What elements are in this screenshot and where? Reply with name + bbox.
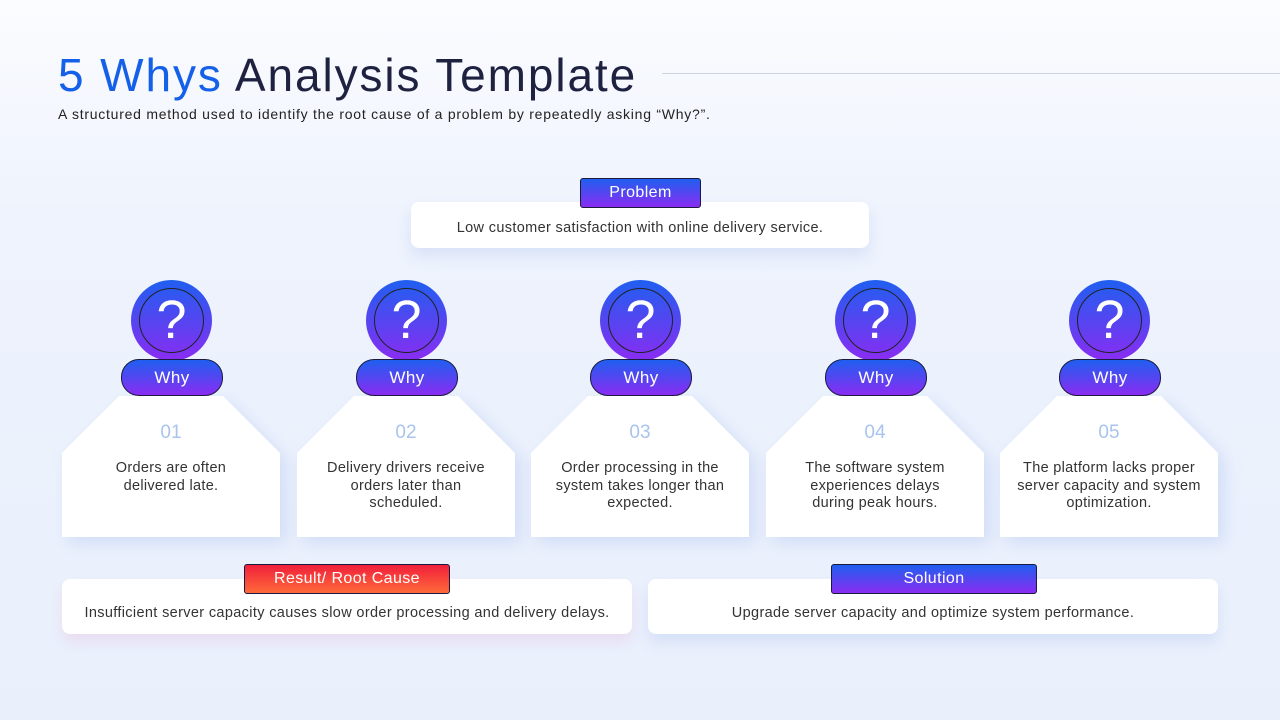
icon: question 5 [1069, 280, 1150, 361]
subtitle: A structured method used to identify the root cause of a problem by repeatedly asking “Why?”. [58, 106, 711, 122]
icon: question 1 [131, 280, 212, 361]
pill 1 [121, 359, 223, 396]
card 1 [62, 396, 290, 547]
solution box: Upgrade server capacity and optimize system performance. [732, 605, 1134, 621]
icon: question 5: ? [1094, 290, 1125, 350]
text 1: Orders are often delivered late. [116, 460, 226, 494]
number 2: 02 [395, 422, 417, 443]
why column 4 [766, 280, 994, 547]
pill 5: Why [1092, 368, 1128, 387]
number 1: 01 [160, 422, 182, 443]
problem box: Low customer satisfaction with online delivery service. [457, 220, 823, 236]
card 5 [1000, 396, 1228, 547]
text 4: The software system experiences delays during peak hours. [805, 460, 945, 511]
solution box [648, 579, 1218, 634]
title rule [662, 73, 1280, 74]
icon: question 3 [600, 280, 681, 361]
text 2: Delivery drivers receive orders later than scheduled. [327, 460, 485, 511]
number 4: 04 [864, 422, 886, 443]
icon: question 4 [835, 280, 916, 361]
pill 2 [356, 359, 458, 396]
problem tag [580, 178, 701, 208]
why column 3 [531, 280, 759, 547]
root cause tag: Result/ Root Cause [274, 570, 420, 587]
icon: question 1: ? [156, 290, 187, 350]
number 3: 03 [629, 422, 651, 443]
icon: question 2: ? [391, 290, 422, 350]
solution tag: Solution [903, 570, 965, 587]
icon: question 2 [366, 280, 447, 361]
why column 1 [62, 280, 290, 547]
text 3: Order processing in the system takes longer than expected. [556, 460, 724, 511]
root cause tag [244, 564, 450, 594]
pill 5 [1059, 359, 1161, 396]
icon: question 4: ? [860, 290, 891, 350]
icon: question 3: ? [625, 290, 656, 350]
card 2 [297, 396, 525, 547]
pill 4 [825, 359, 927, 396]
card 3 [531, 396, 759, 547]
problem tag: Problem [609, 184, 672, 201]
card 4 [766, 396, 994, 547]
pill 1: Why [154, 368, 190, 387]
problem box [411, 202, 869, 248]
why column 2 [297, 280, 525, 547]
pill 2: Why [389, 368, 425, 387]
pill 4: Why [858, 368, 894, 387]
pill 3: Why [623, 368, 659, 387]
solution tag [831, 564, 1037, 594]
title: 5 Whys Analysis Template [58, 49, 637, 101]
why column 5 [1000, 280, 1228, 547]
root cause box: Insufficient server capacity causes slow order processing and delivery delays. [84, 605, 610, 621]
number 5: 05 [1098, 422, 1120, 443]
root cause box [62, 579, 632, 634]
text 5: The platform lacks proper server capacity and system optimization. [1017, 460, 1201, 511]
pill 3 [590, 359, 692, 396]
